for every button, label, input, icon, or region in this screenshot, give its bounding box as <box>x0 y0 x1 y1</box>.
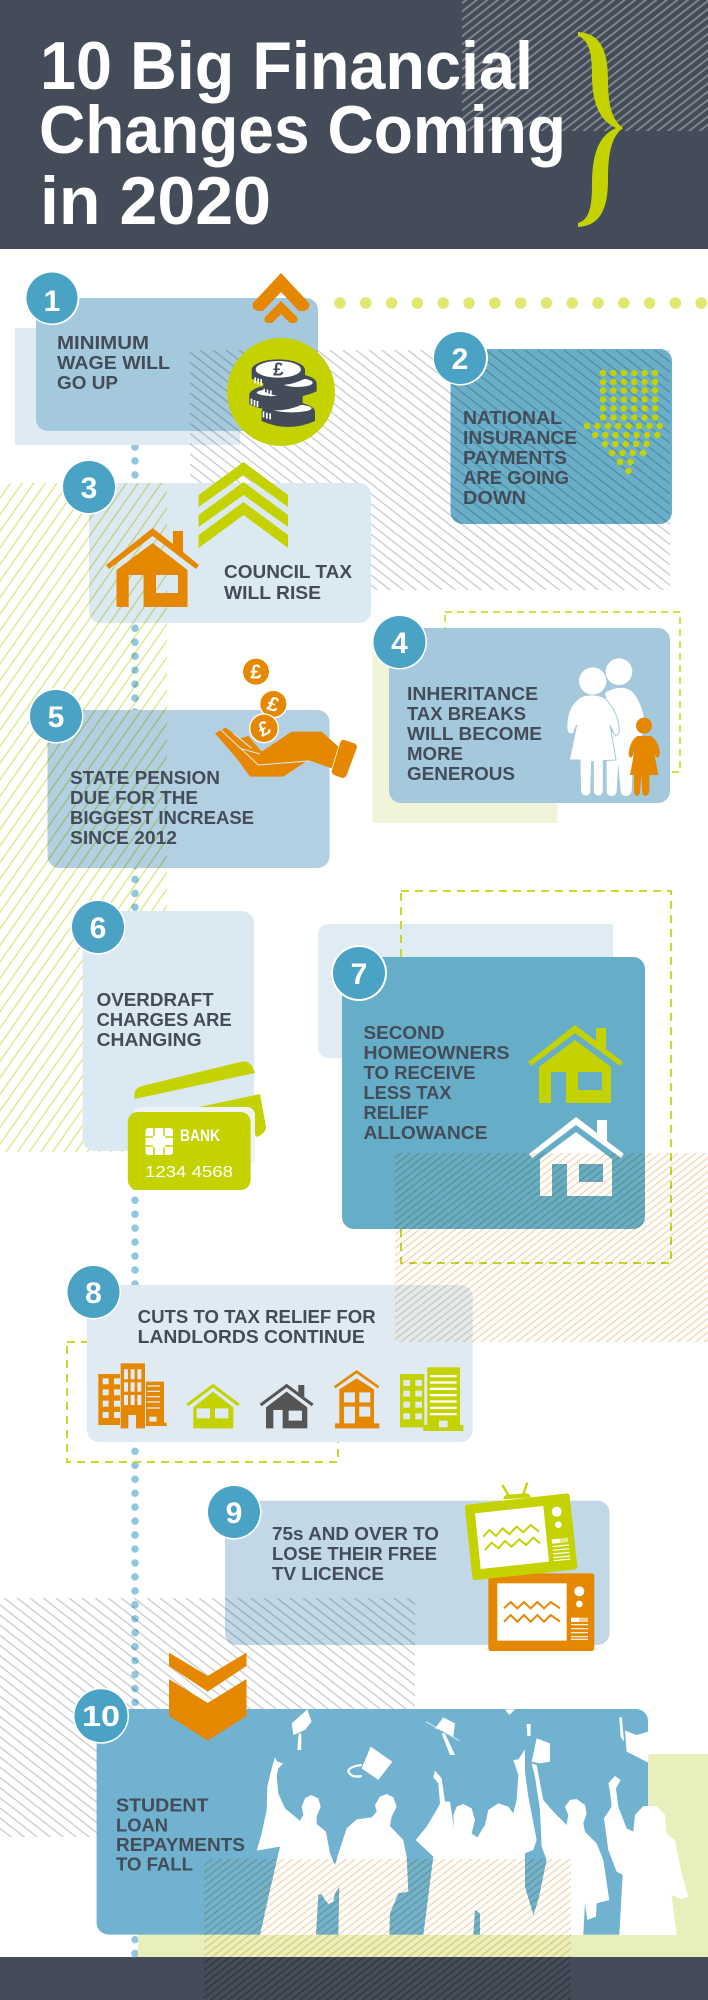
icon: hand with coins: £ <box>264 693 282 717</box>
badge 8: 8 <box>85 1277 102 1310</box>
icon: lime brace <box>578 32 623 227</box>
panel 1 back <box>15 328 240 445</box>
badge 1: 1 <box>44 285 60 318</box>
badge 6 <box>70 900 126 954</box>
panel 5 background <box>48 710 330 868</box>
icon: dark house small <box>261 1385 313 1428</box>
panel 10 group <box>97 1709 688 1935</box>
badge 9: 9 <box>226 1497 242 1530</box>
icon: coins on lime circle <box>227 338 335 446</box>
item 7 content <box>331 945 624 1196</box>
text 9: 75s AND OVER TO <box>272 1523 439 1544</box>
footer band <box>0 1957 708 2000</box>
icon: lime tv <box>465 1483 577 1580</box>
title: in 2020 <box>40 163 271 239</box>
panel 8 dashed frame <box>67 1342 338 1462</box>
icon: orange house small <box>335 1372 379 1428</box>
text 7: LESS TAX <box>364 1082 452 1103</box>
title <box>39 28 566 239</box>
item 2 content <box>433 330 670 508</box>
text 6: CHANGING <box>97 1029 202 1050</box>
text 8: LANDLORDS CONTINUE <box>138 1326 365 1347</box>
text 10: REPAYMENTS <box>116 1834 245 1855</box>
graduates silhouette <box>257 1709 688 1935</box>
icon: hand with coins: £ <box>255 717 274 742</box>
icon: bank card: BANK <box>180 1126 221 1145</box>
text 7: TO RECEIVE <box>364 1062 476 1083</box>
icon: lime house small <box>187 1386 239 1428</box>
text 5: DUE FOR THE <box>70 787 198 808</box>
text 2: INSURANCE <box>463 427 577 448</box>
item 5 content <box>28 659 357 848</box>
icon: televisions <box>465 1483 594 1651</box>
title: 10 Big Financial <box>40 28 533 104</box>
icon: orange tower block <box>98 1363 167 1428</box>
icon: orange down chevrons <box>169 1653 246 1741</box>
text 5: STATE PENSION <box>70 767 220 788</box>
text 6: CHARGES ARE <box>97 1009 232 1030</box>
text 2: ARE GOING <box>463 467 569 488</box>
text 2: PAYMENTS <box>463 447 567 468</box>
text 1: WAGE WILL <box>57 352 170 373</box>
timeline dots <box>131 433 139 1957</box>
badge 5 <box>28 688 84 744</box>
badge 3: 3 <box>81 472 97 505</box>
text 2 <box>463 407 577 508</box>
text 8: CUTS TO TAX RELIEF FOR <box>138 1306 376 1327</box>
badge 4: 4 <box>391 627 408 660</box>
badge 7 <box>331 945 387 1001</box>
badge 7: 7 <box>351 958 367 991</box>
icon: bank card <box>128 1062 266 1190</box>
panel 7 <box>342 957 645 1229</box>
text 2: NATIONAL <box>463 407 562 428</box>
lime dotted line <box>340 297 708 309</box>
text 2: DOWN <box>463 487 526 508</box>
panel 1 <box>36 298 318 431</box>
panel 10 lime back <box>138 1754 708 1957</box>
icons: buildings row <box>98 1363 463 1431</box>
badge 5: 5 <box>48 701 64 734</box>
panel 9 background <box>225 1501 610 1645</box>
text 5: SINCE 2012 <box>70 827 177 848</box>
text 10: TO FALL <box>116 1854 193 1875</box>
icon: lime office block <box>400 1367 463 1431</box>
badge 8 <box>66 1264 121 1320</box>
panel 8 background <box>87 1285 473 1442</box>
text 10: STUDENT <box>116 1794 209 1815</box>
text 8 <box>138 1306 376 1347</box>
text 4: WILL BECOME <box>407 723 542 744</box>
text 7 <box>364 1022 510 1143</box>
icon: white house <box>529 1117 624 1196</box>
text 3: WILL RISE <box>224 582 321 603</box>
text 4: MORE <box>407 743 463 764</box>
icon: lime house <box>528 1025 623 1103</box>
item 8 content <box>66 1264 463 1431</box>
text 3: COUNCIL TAX <box>224 561 353 582</box>
badge 3 <box>62 460 116 514</box>
graduation caps <box>292 1709 648 1780</box>
icon: orange tv <box>488 1573 594 1651</box>
icon: coins on lime circle: £ <box>273 359 284 380</box>
badge 9 <box>206 1484 262 1540</box>
badge 2: 2 <box>452 343 468 376</box>
text 9: LOSE THEIR FREE <box>272 1543 437 1564</box>
text 4: INHERITANCE <box>407 683 538 704</box>
icon: orange up chevrons <box>253 273 309 323</box>
text 7: RELIEF <box>364 1102 428 1123</box>
panel 6 group <box>70 900 266 1190</box>
badge 10 <box>73 1688 129 1744</box>
text 7: SECOND <box>364 1022 444 1043</box>
text 4 <box>407 683 542 784</box>
text 10: LOAN <box>116 1814 168 1835</box>
title: Changes Coming <box>39 92 566 168</box>
icon: lime up chevrons <box>199 462 288 548</box>
text 4: GENEROUS <box>407 763 515 784</box>
icon: dotted down arrow <box>587 373 670 471</box>
badge 2 <box>433 330 488 386</box>
panel 4 group <box>372 612 680 823</box>
badge 1 <box>26 271 80 325</box>
text 3 <box>224 561 353 603</box>
text 5: BIGGEST INCREASE <box>70 807 254 828</box>
text 9: TV LICENCE <box>272 1563 384 1584</box>
panel 7 back <box>318 924 613 1058</box>
icon: hand with coins <box>215 659 357 778</box>
text 6 <box>97 989 232 1050</box>
badge 4 <box>372 614 427 670</box>
icon: bank card: 1234 4568 <box>145 1164 233 1181</box>
text 10 <box>116 1794 245 1875</box>
header band <box>0 0 708 249</box>
text 1: MINIMUM <box>57 332 149 353</box>
badge 6: 6 <box>90 912 106 945</box>
panel 2 background <box>450 349 672 524</box>
text 1 <box>57 332 170 393</box>
text 4: TAX BREAKS <box>407 703 526 724</box>
text 6: OVERDRAFT <box>97 989 214 1010</box>
icon: family <box>567 658 660 796</box>
icon: hand with coins: £ <box>250 662 262 684</box>
panel 3 <box>89 483 371 623</box>
badge 10: 10 <box>82 1701 120 1733</box>
text 5 <box>70 767 254 848</box>
icon: orange house <box>106 528 199 607</box>
text 7: ALLOWANCE <box>364 1122 488 1143</box>
item 3 content <box>62 460 353 607</box>
item 9 content <box>206 1483 594 1651</box>
text 1: GO UP <box>57 372 118 393</box>
text 9 <box>272 1523 439 1584</box>
text 7: HOMEOWNERS <box>364 1042 510 1063</box>
